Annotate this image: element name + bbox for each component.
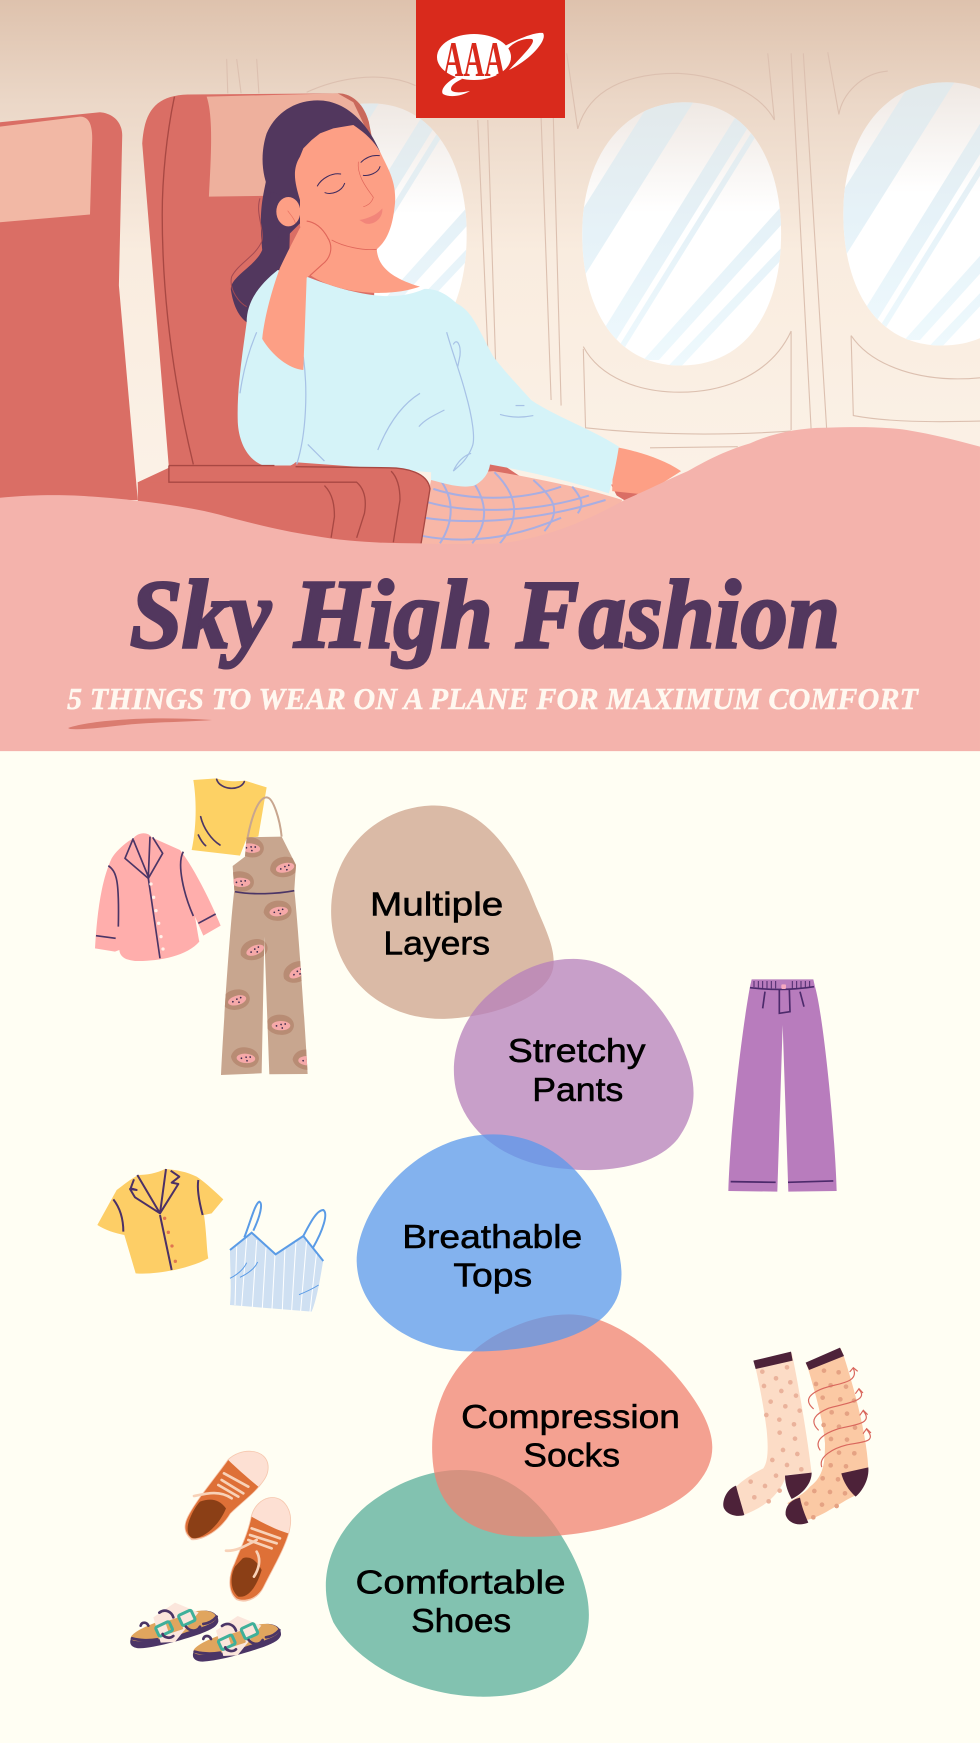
illustration scene <box>0 52 980 751</box>
headrest <box>207 93 373 197</box>
yellow tee <box>192 778 267 856</box>
blob: breathable tops: Tops <box>453 1258 532 1295</box>
blob: multiple layers: Multiple <box>370 887 503 924</box>
blob: comfortable shoes: Shoes <box>411 1603 511 1640</box>
front seat headrest <box>0 117 92 222</box>
rear seat <box>138 93 378 544</box>
sleeping face <box>231 100 420 307</box>
subtitle: 5 THINGS TO WEAR ON A PLANE FOR MAXIMUM COMFORT <box>67 681 919 716</box>
sandal two <box>193 1616 281 1662</box>
blob: comfortable shoes <box>326 1470 589 1697</box>
cabin wall background <box>0 0 980 560</box>
blob: breathable tops: Breathable <box>402 1219 582 1256</box>
sneaker two <box>226 1498 290 1601</box>
window: right <box>756 82 980 380</box>
title: Sky High Fashion <box>130 561 840 669</box>
hair: ponytail <box>231 178 291 322</box>
blob: stretchy pants <box>454 959 694 1170</box>
blob: compression socks: Compression <box>461 1399 680 1436</box>
blue striped cami <box>230 1202 325 1312</box>
sweater folds <box>240 332 533 471</box>
blob: stretchy pants: Stretchy <box>508 1033 646 1070</box>
compression socks <box>723 1348 871 1524</box>
blob: multiple layers: Layers <box>383 925 490 962</box>
yellow short-sleeve shirt <box>97 1169 223 1274</box>
sweater <box>238 270 619 493</box>
blanket with grid <box>418 471 622 544</box>
blob: breathable tops <box>357 1134 621 1351</box>
blob: comfortable shoes: Comfortable <box>356 1564 566 1601</box>
sneaker one <box>185 1452 268 1539</box>
window: centre <box>494 102 798 400</box>
front seat <box>0 112 138 500</box>
sandal one <box>130 1603 218 1648</box>
arm and hand under chin <box>262 221 332 370</box>
AAA logo <box>416 0 565 118</box>
window: left <box>180 103 483 401</box>
left sock <box>723 1352 812 1516</box>
clothes: multiple layers <box>95 778 322 1075</box>
blobs with labels <box>326 805 712 1697</box>
pink shirt <box>95 833 221 961</box>
patterned overalls <box>221 796 308 1075</box>
right sock <box>786 1348 868 1524</box>
blob: compression socks: Socks <box>523 1438 620 1475</box>
cabin wall panel lines <box>227 52 980 448</box>
blob: multiple layers <box>331 805 554 1019</box>
neck <box>310 237 420 293</box>
forearm on lap <box>612 447 681 494</box>
pink wave <box>0 427 980 751</box>
blob: compression socks <box>432 1314 712 1537</box>
armrest <box>138 466 430 544</box>
page background <box>0 750 980 1743</box>
compression arrows <box>809 1368 871 1467</box>
clothes: breathable tops <box>97 1169 325 1312</box>
shoes: sneakers and sandals <box>130 1452 290 1662</box>
AAA logo: AAA <box>443 31 505 87</box>
brush underline <box>68 718 212 729</box>
blob: stretchy pants: Pants <box>532 1072 623 1109</box>
seat end behind lap <box>474 443 647 502</box>
stretchy purple pants <box>728 979 837 1192</box>
